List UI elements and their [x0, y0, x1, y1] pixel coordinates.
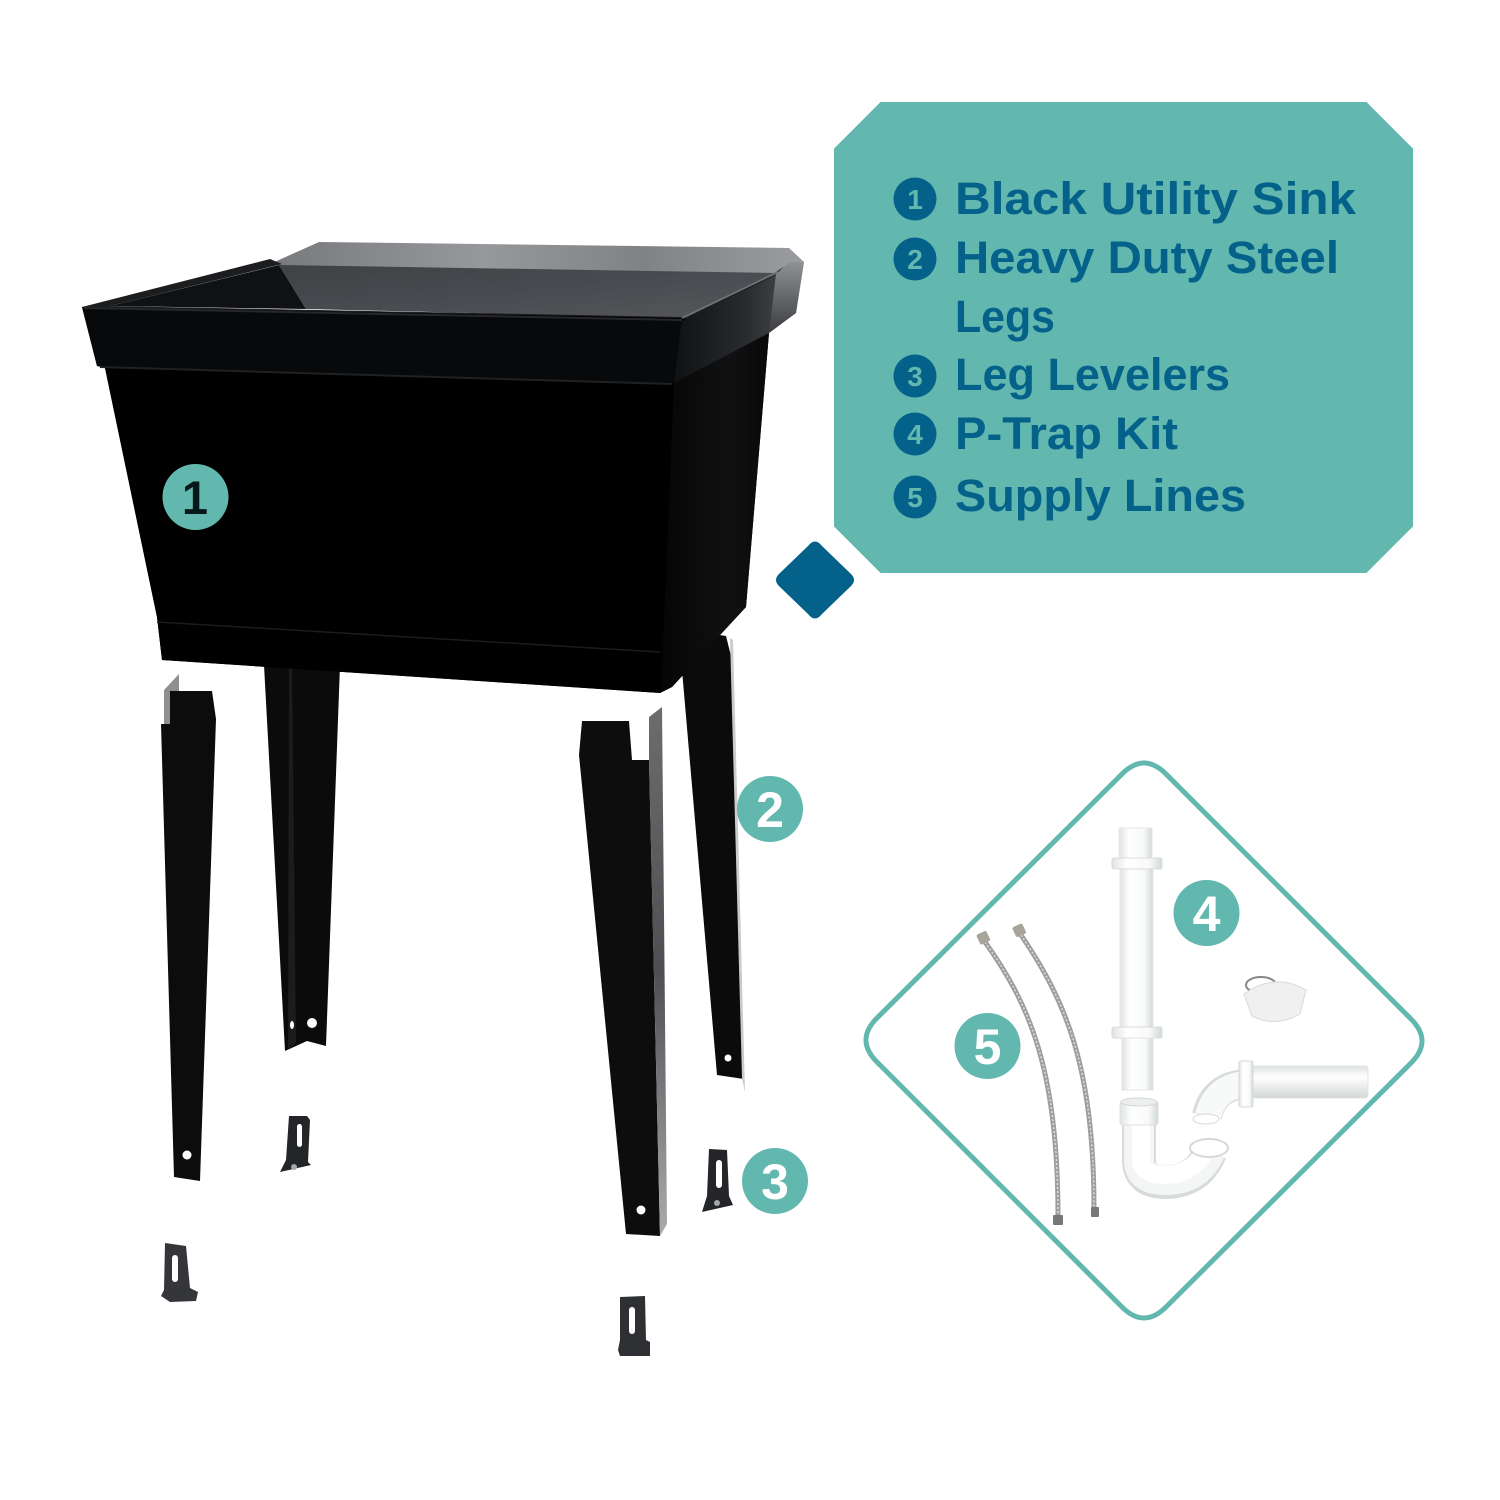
list item 2: Legs [955, 291, 1055, 342]
P-trap bend [1120, 1098, 1228, 1182]
badge 1 [162, 464, 228, 530]
sink basin [82, 242, 804, 693]
sink front rim [82, 307, 682, 383]
list item 4: P-Trap Kit [955, 408, 1178, 459]
leg: front left [161, 674, 216, 1181]
panel: parts list [835, 103, 1412, 572]
badge 4 [1174, 880, 1240, 946]
tailpiece tube [1112, 828, 1162, 1090]
badge 5: 5 [974, 1019, 1001, 1075]
badge 1: 1 [182, 471, 208, 524]
leveler front left [161, 1243, 198, 1302]
list item 2: 2 [907, 244, 923, 275]
badge 3 [742, 1148, 808, 1214]
sink right flange [769, 262, 804, 333]
list item 5: 5 [907, 482, 923, 513]
list item 3: 3 [907, 361, 923, 392]
sink interior left wall [110, 265, 306, 309]
sink right side [660, 276, 776, 693]
leveler back left [280, 1116, 311, 1172]
list item 5: Supply Lines [955, 470, 1246, 521]
badge 2: 2 [756, 782, 784, 838]
list item 1: Black Utility Sink [955, 173, 1357, 224]
list item 2: Heavy Duty Steel [955, 232, 1339, 283]
levelers [161, 1116, 733, 1356]
leveler back right [702, 1149, 733, 1212]
list item 4: 4 [907, 419, 923, 450]
leg: back left [264, 665, 340, 1051]
badge 4: 4 [1193, 886, 1221, 942]
leveler front right [618, 1296, 650, 1356]
panel background [835, 103, 1412, 572]
list item 2 [894, 232, 1339, 342]
decorative diamond [776, 542, 854, 618]
leg: front right [579, 707, 667, 1236]
sink front body [105, 368, 674, 693]
leg: back right [682, 632, 745, 1092]
badge 5 [954, 1013, 1020, 1079]
diamond outline [866, 763, 1422, 1318]
list item 3: Leg Levelers [955, 349, 1230, 400]
sink back rim [270, 242, 804, 333]
sink interior back wall [279, 265, 776, 318]
badge 3: 3 [761, 1154, 789, 1210]
badge 2 [737, 776, 803, 842]
rubber stopper [1244, 977, 1306, 1022]
sink silhouette backing [82, 307, 769, 693]
supply lines [976, 923, 1099, 1225]
elbow pipe [1193, 1061, 1368, 1124]
sink rim top edge [82, 259, 786, 322]
list item 1: 1 [907, 184, 923, 215]
panel: accessories diamond [866, 763, 1422, 1318]
